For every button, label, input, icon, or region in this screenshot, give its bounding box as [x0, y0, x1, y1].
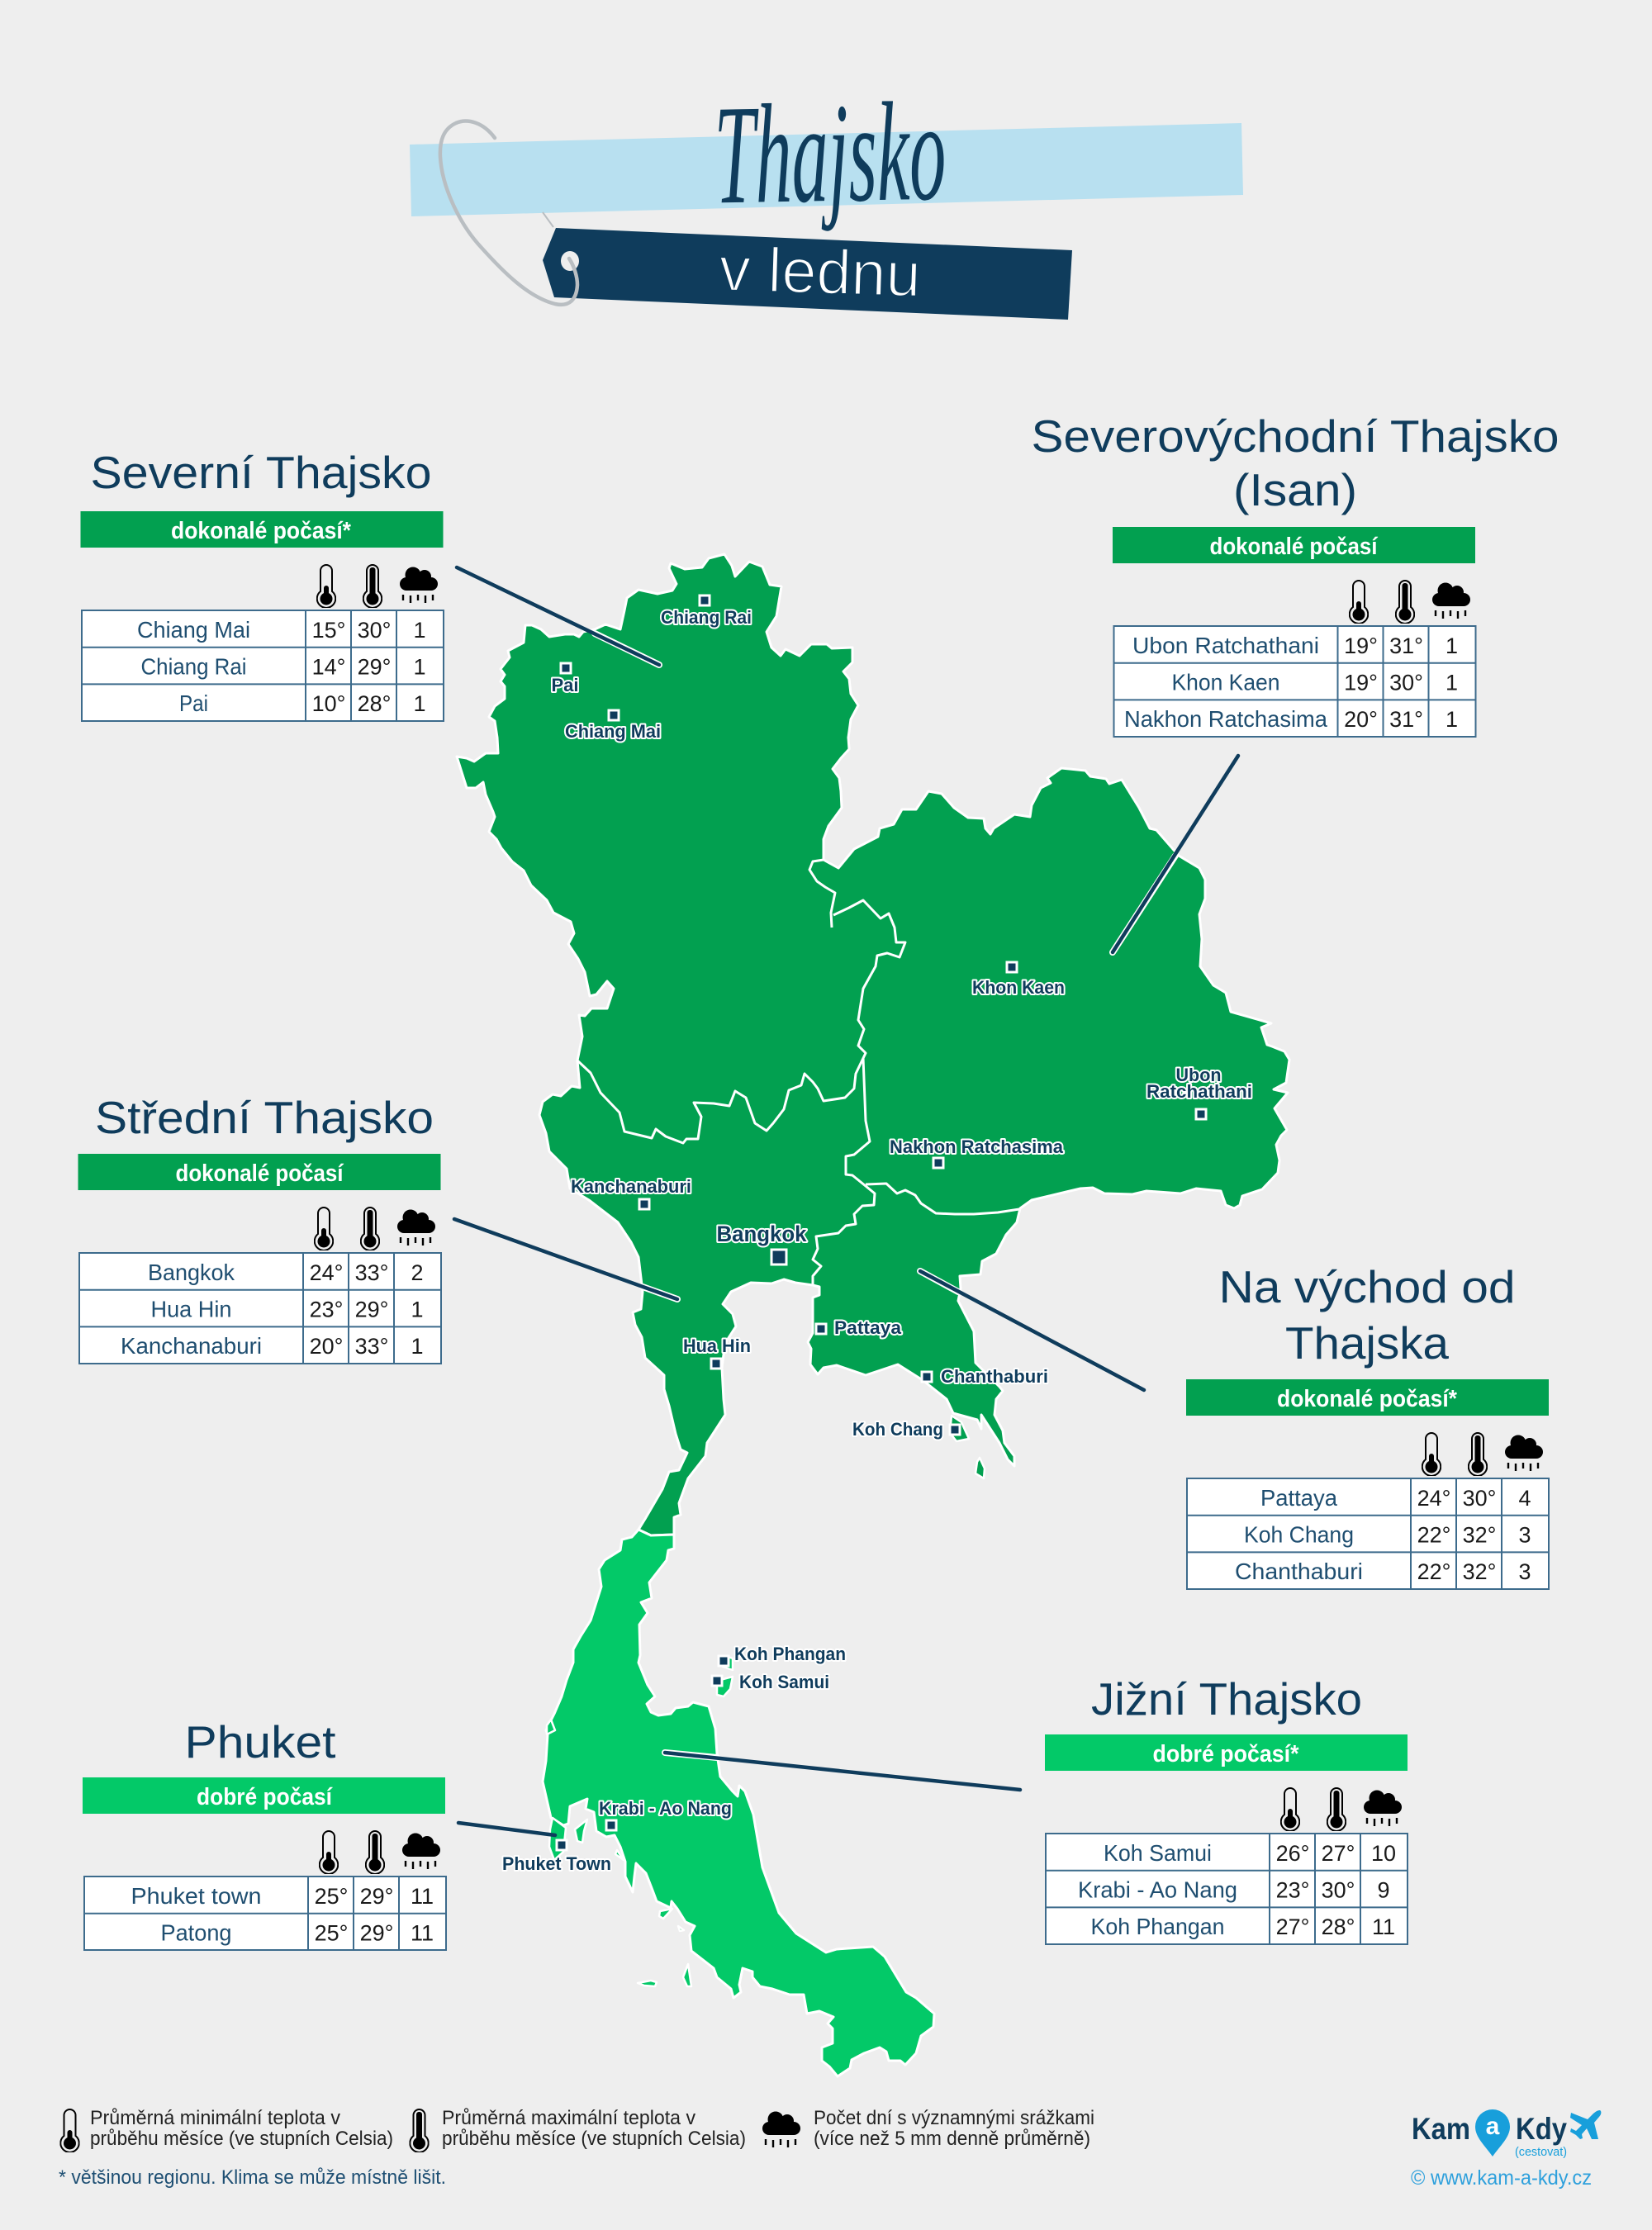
climate table: 30°: [358, 618, 391, 643]
heading: Na východ od: [1219, 1261, 1515, 1312]
climate table: 1: [411, 1334, 424, 1359]
weather bar: [1186, 1379, 1549, 1416]
subtitle dark tag: [543, 228, 1072, 320]
city labels: Nakhon Ratchasima: [890, 1136, 1064, 1157]
legend text: minimum temperature: průběhu měsíce (ve stupních Celsia): [90, 2128, 393, 2150]
icons row: [1350, 581, 1470, 624]
climate table: Nakhon Ratchasima: [1124, 706, 1327, 732]
climate table: 1: [413, 691, 426, 716]
southern islands: [547, 1656, 733, 1986]
city labels: Phuket Town: [502, 1853, 611, 1874]
website url: © www.kam-a-kdy.cz: [1411, 2166, 1592, 2190]
legend text: rain days: Počet dní s významnými srážkami: [814, 2107, 1094, 2129]
climate table: 10: [1371, 1841, 1396, 1866]
logo: [1411, 2109, 1601, 2190]
region borders: [577, 860, 1019, 1285]
climate table: [1046, 1834, 1408, 1944]
climate table: 30°: [1322, 1878, 1355, 1903]
climate table: 1: [413, 654, 426, 679]
climate table: 28°: [1322, 1914, 1355, 1939]
climate table: 1: [1446, 633, 1458, 658]
weather bar: [1045, 1734, 1408, 1771]
climate table: Phuket town: [131, 1883, 261, 1909]
city labels: Pattaya: [834, 1317, 902, 1338]
map of Thailand: [454, 554, 1289, 2076]
icon: rain cloud: [762, 2111, 800, 2147]
climate table: 4: [1518, 1486, 1531, 1511]
tag hole: [561, 251, 579, 271]
south region: [543, 1530, 934, 2076]
climate table: 2: [411, 1260, 424, 1285]
legend text: minimum temperature: Průměrná minimální teplota v: [90, 2107, 340, 2129]
city marker squares: [557, 595, 1206, 1850]
climate table: 1: [1446, 671, 1458, 695]
climate table: 9: [1377, 1878, 1390, 1903]
heading: Střední Thajsko: [95, 1092, 434, 1143]
climate table: Khon Kaen: [1171, 669, 1280, 695]
climate table: 20°: [310, 1334, 343, 1359]
climate table: 1: [1446, 707, 1458, 732]
panel: Severní Thajsko: [81, 447, 444, 721]
icon: map pin: [1475, 2109, 1510, 2156]
legend text: rain days: [814, 2107, 1094, 2150]
climate table: Patong: [160, 1919, 231, 1946]
climate table: 20°: [1344, 707, 1378, 732]
heading: Phuket: [185, 1716, 335, 1767]
heading: (Isan): [1233, 464, 1357, 515]
icons row: [315, 1208, 435, 1250]
logo word Kdy: Kdy: [1516, 2112, 1567, 2146]
climate table: 29°: [360, 1921, 393, 1946]
weather bar: [78, 1154, 441, 1190]
climate table: 25°: [315, 1921, 348, 1946]
Koh Chang island: [950, 1416, 969, 1441]
icons row: [1281, 1788, 1402, 1831]
climate table: 19°: [1344, 671, 1378, 695]
legend text: maximum temperature: [442, 2107, 746, 2150]
tag string: [440, 121, 577, 305]
title: Thajsko: [713, 74, 947, 234]
weather bar: dobré počasí: [197, 1784, 333, 1810]
climate table: 3: [1518, 1559, 1531, 1584]
climate table: 31°: [1389, 707, 1423, 732]
climate table: 32°: [1463, 1523, 1496, 1548]
leader line: Phuket: [458, 1823, 555, 1835]
icon: minimum thermometer: [60, 2109, 79, 2152]
climate table: Krabi - Ao Nang: [1078, 1877, 1237, 1903]
panel: Jižní Thajsko: [1045, 1673, 1408, 1944]
weather bar: dokonalé počasí*: [1277, 1386, 1458, 1412]
climate table: 22°: [1417, 1559, 1450, 1584]
title tag group: [410, 74, 1243, 320]
city labels: Krabi - Ao Nang: [599, 1798, 732, 1819]
weather bar: dobré počasí*: [1153, 1741, 1299, 1767]
legend: [59, 2107, 1094, 2189]
icon: plane: [1570, 2110, 1601, 2139]
heading: Jižní Thajsko: [1091, 1673, 1362, 1725]
city labels: Ratchathani: [1146, 1081, 1252, 1102]
climate table: 1: [411, 1297, 424, 1321]
climate table: Koh Phangan: [1090, 1914, 1224, 1939]
city labels: Bangkok: [717, 1222, 807, 1246]
climate table: 24°: [1417, 1486, 1450, 1511]
title band light blue: [410, 123, 1243, 216]
climate table: 15°: [312, 618, 345, 643]
leader line: north: [457, 567, 659, 665]
city labels: Chiang Rai: [661, 607, 752, 628]
climate table: [82, 610, 444, 721]
climate table: 11: [411, 1921, 434, 1946]
climate table: Hua Hin: [150, 1297, 231, 1321]
panel: Phuket: [83, 1716, 446, 1950]
logo word Kam: Kam: [1412, 2112, 1470, 2146]
logo subtitle: (cestovat): [1515, 2145, 1567, 2159]
legend text: minimum temperature: [90, 2107, 393, 2150]
city labels: Koh Phangan: [734, 1644, 846, 1664]
climate table: 28°: [358, 691, 391, 716]
panel: Střední Thajsko: [78, 1092, 441, 1364]
city labels: Ubon: [1176, 1065, 1221, 1085]
city labels: Koh Chang: [852, 1419, 943, 1440]
climate table: 30°: [1389, 671, 1423, 695]
climate table: [84, 1877, 446, 1950]
weather bar: [81, 511, 443, 548]
string short segment: [543, 212, 553, 227]
climate table: Pai: [179, 690, 208, 716]
city labels: Kanchanaburi: [571, 1176, 691, 1197]
climate table: Koh Chang: [1244, 1521, 1354, 1548]
climate table: Bangkok: [148, 1260, 235, 1285]
panel: Severovýchodní Thajsko: [1031, 410, 1559, 737]
panel: Na východ od Thajska: [1186, 1261, 1549, 1589]
weather bar: dokonalé počasí*: [171, 518, 352, 544]
climate table: 33°: [355, 1334, 388, 1359]
weather bar: [1113, 527, 1475, 563]
climate table: Chiang Rai: [140, 654, 246, 679]
heading: Severní Thajsko: [91, 447, 431, 498]
climate table: 25°: [315, 1884, 348, 1909]
city labels: [502, 607, 1252, 1874]
climate table: 31°: [1389, 633, 1423, 658]
climate table: [79, 1253, 441, 1364]
climate table: 1: [413, 618, 426, 643]
climate table: 10°: [312, 691, 345, 716]
city labels: Chiang Mai: [565, 721, 661, 742]
climate table: 30°: [1463, 1486, 1496, 1511]
climate table: 3: [1518, 1523, 1531, 1548]
climate table: 29°: [360, 1884, 393, 1909]
climate table: 22°: [1417, 1523, 1450, 1548]
weather bar: [83, 1777, 445, 1814]
climate table: 24°: [310, 1260, 343, 1285]
climate table: 27°: [1322, 1841, 1355, 1866]
icon: maximum thermometer: [410, 2109, 429, 2152]
icons row: [320, 1831, 440, 1874]
climate table: 32°: [1463, 1559, 1496, 1584]
city labels: Khon Kaen: [972, 977, 1065, 998]
climate table: 26°: [1276, 1841, 1309, 1866]
climate table: 29°: [358, 654, 391, 679]
heading: [1031, 410, 1559, 515]
leader line: northeast: [1113, 756, 1238, 952]
climate table: Ubon Ratchathani: [1132, 633, 1319, 658]
city labels: Koh Samui: [739, 1672, 829, 1692]
icons row: [317, 565, 438, 608]
weather bar: dokonalé počasí: [1209, 534, 1378, 560]
icons row: [1422, 1433, 1543, 1476]
city labels: Pai: [552, 675, 578, 695]
logo letter a: a: [1486, 2113, 1500, 2140]
leader line: central: [454, 1219, 677, 1299]
subtitle: v lednu: [719, 234, 922, 311]
leader line: south: [665, 1753, 1020, 1790]
climate table: [1187, 1478, 1549, 1589]
footnote: * většinou regionu. Klima se může místně lišit.: [59, 2166, 446, 2189]
climate table: Koh Samui: [1104, 1840, 1212, 1866]
legend text: maximum temperature: Průměrná maximální teplota v: [442, 2107, 695, 2129]
climate table: 23°: [1276, 1878, 1309, 1903]
climate table: 19°: [1344, 633, 1378, 658]
climate table: Chiang Mai: [137, 617, 250, 643]
legend text: maximum temperature: průběhu měsíce (ve stupních Celsia): [442, 2128, 746, 2150]
climate table: Pattaya: [1260, 1485, 1337, 1511]
city labels: Hua Hin: [683, 1336, 751, 1356]
heading: [1219, 1261, 1515, 1369]
climate table: 23°: [310, 1297, 343, 1321]
weather bar: dokonalé počasí: [175, 1160, 344, 1187]
climate table: 11: [1372, 1914, 1395, 1939]
north, northeast, central and east regions: [457, 554, 1289, 1535]
climate table: 29°: [355, 1297, 388, 1321]
climate table: [1113, 626, 1475, 737]
climate table: 27°: [1276, 1914, 1309, 1939]
heading: Thajska: [1285, 1317, 1449, 1369]
legend text: rain days: (více než 5 mm denně průměrně): [814, 2128, 1090, 2150]
climate table: Chanthaburi: [1235, 1559, 1363, 1584]
Koh Kut island: [976, 1458, 985, 1478]
climate table: 14°: [312, 654, 345, 679]
heading: Severovýchodní Thajsko: [1031, 410, 1559, 462]
climate table: 33°: [355, 1260, 388, 1285]
city labels: Chanthaburi: [941, 1366, 1048, 1387]
leader line: east: [920, 1271, 1144, 1390]
climate table: Kanchanaburi: [121, 1333, 262, 1359]
climate table: 11: [411, 1884, 434, 1909]
